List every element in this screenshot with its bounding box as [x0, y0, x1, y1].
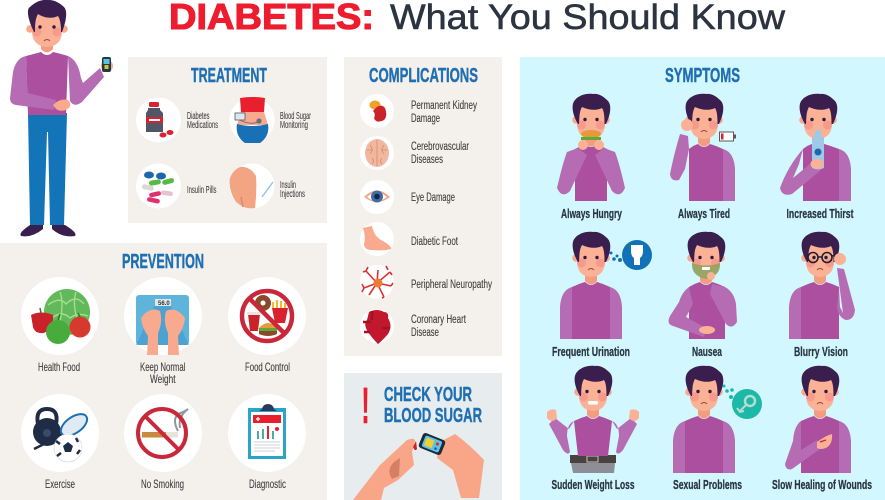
- label: diabetes medications: [187, 111, 218, 131]
- symptom figure: sexual problems: [673, 366, 735, 473]
- label: keep normal weight: Weight: [150, 372, 176, 386]
- label: permanent kidney damage: [411, 100, 477, 125]
- heading: complications: COMPLICATIONS: [369, 64, 478, 87]
- label: permanent kidney damage: Damage: [411, 113, 440, 125]
- heading: check your blood sugar: CHECK YOUR: [384, 383, 472, 406]
- panel: check your blood sugar: [344, 373, 502, 500]
- heading: check your blood sugar: BLOOD SUGAR: [384, 404, 482, 427]
- icon: eye: [360, 180, 394, 214]
- symptom figure: slow healing of wounds: [785, 366, 851, 473]
- label: cerebrovascular diseases: [411, 141, 469, 166]
- label: insulin injections: Injections: [280, 189, 305, 200]
- label: sudden weight loss: Sudden Weight Loss: [552, 477, 634, 492]
- symptom figure: blurry vision: [789, 232, 855, 339]
- panel: symptoms: [520, 57, 885, 500]
- icon: food control: [228, 277, 306, 355]
- label: always hungry: Always Hungry: [561, 206, 622, 221]
- panel: check your blood sugar: !: [362, 377, 370, 434]
- label: frequent urination: Frequent Urination: [552, 344, 630, 359]
- symptom figure: increased thirst: [780, 94, 851, 201]
- icon: no smoking: [124, 394, 202, 472]
- label: nausea: Nausea: [692, 344, 722, 359]
- label: diabetes medications: Medications: [187, 120, 218, 131]
- icon: weighing scale: [124, 277, 202, 355]
- label: exercise: Exercise: [45, 477, 75, 491]
- label: insulin pills: Insulin Pills: [187, 185, 216, 196]
- heading: symptoms: SYMPTOMS: [665, 64, 740, 87]
- label: coronary heart disease: [411, 314, 467, 339]
- label: always tired: Always Tired: [678, 206, 730, 221]
- icon: sexual health bubble: [722, 384, 762, 419]
- label: coronary heart disease: Disease: [411, 327, 439, 339]
- label: keep normal weight: [140, 360, 186, 386]
- label: blood sugar monitoring: Monitoring: [280, 120, 308, 131]
- icon: insulin injection: [230, 164, 274, 208]
- symptom figure: always hungry: [557, 94, 625, 201]
- heading: check your blood sugar: [384, 383, 482, 427]
- icon: exercise: [21, 394, 99, 472]
- icon: weighing scale: 56.0: [158, 301, 170, 307]
- icon: peripheral neuron: [360, 265, 394, 299]
- label: cerebrovascular diseases: Cerebrovascular: [411, 141, 469, 153]
- symptom figure: frequent urination: [560, 232, 622, 339]
- label: insulin injections: Insulin: [280, 180, 296, 191]
- symptom figure: nausea: [669, 232, 737, 339]
- icon: diagnostic clipboard: [228, 394, 306, 472]
- label: eye damage: Eye Damage: [411, 192, 455, 204]
- label: coronary heart disease: Coronary Heart: [411, 314, 467, 326]
- icon: kidney: [360, 94, 394, 128]
- icon: heart: [360, 309, 394, 344]
- icon: brain: [360, 136, 394, 170]
- label: food control: Food Control: [245, 360, 290, 374]
- label: blood sugar monitoring: [280, 111, 311, 131]
- label: insulin injections: [280, 180, 305, 200]
- label: permanent kidney damage: Permanent Kidney: [411, 100, 477, 112]
- label: increased thirst: Increased Thirst: [786, 206, 854, 221]
- icon: diabetes medications: [136, 98, 181, 142]
- label: diagnostic: Diagnostic: [249, 477, 286, 491]
- label: blood sugar monitoring: Blood Sugar: [280, 111, 311, 122]
- label: diabetes medications: Diabetes: [187, 111, 210, 122]
- illustration: hands testing blood sugar: [353, 432, 484, 500]
- icon: healthy food: [21, 277, 99, 355]
- panel: prevention: [0, 243, 327, 500]
- label: sexual problems: Sexual Problems: [673, 477, 742, 492]
- icon: low battery: [720, 132, 736, 141]
- symptom figure: always tired: [670, 94, 735, 201]
- label: blurry vision: Blurry Vision: [794, 344, 848, 359]
- icon: blood sugar monitoring: [230, 97, 274, 143]
- symptom figure: sudden weight loss: [547, 366, 639, 473]
- heading: prevention: PREVENTION: [122, 250, 204, 273]
- label: health food: Health Food: [38, 360, 80, 374]
- panel: treatment: [128, 57, 327, 223]
- label: no smoking: No Smoking: [141, 477, 184, 491]
- icon: diabetic foot: [360, 222, 394, 256]
- title: [169, 0, 786, 37]
- label: peripheral neuropathy: Peripheral Neuropathy: [411, 279, 492, 291]
- main figure: man with glucose meter: [10, 0, 113, 236]
- label: diabetic foot: Diabetic Foot: [411, 236, 459, 248]
- label: keep normal weight: Keep Normal: [140, 360, 186, 374]
- icon: toilet bubble: [610, 240, 652, 270]
- panel: complications: [344, 57, 502, 356]
- label: cerebrovascular diseases: Diseases: [411, 154, 443, 166]
- heading: treatment: TREATMENT: [191, 64, 267, 87]
- icon: insulin pills: [136, 164, 181, 208]
